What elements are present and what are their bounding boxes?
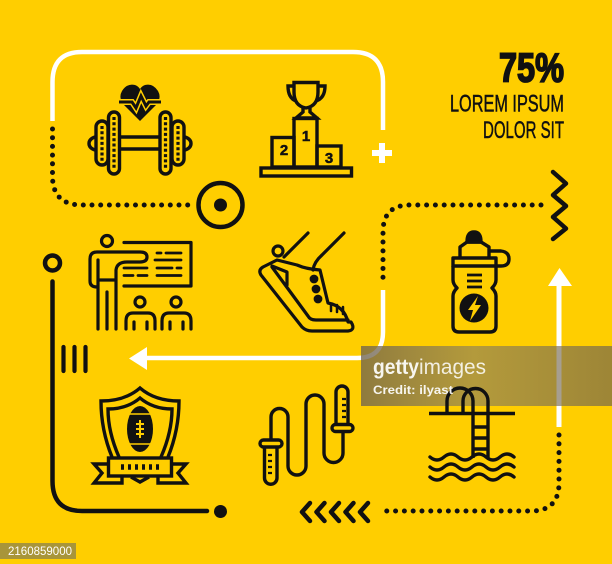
heart: [120, 85, 160, 121]
white arrow left: [129, 290, 383, 370]
target circle: [198, 183, 242, 227]
headline text block: DOLOR SIT: [483, 117, 564, 144]
watermark logo text: getty: [373, 355, 419, 379]
watermark logo text: [373, 355, 486, 397]
headline text block: 75%: [499, 44, 564, 90]
icon: trophy on podium: 2: [280, 142, 288, 159]
icon: running shoe: [260, 233, 353, 331]
icon: pool ladder: [429, 388, 515, 480]
dotted connector right: [383, 205, 541, 283]
dotted connector to target: [52, 129, 190, 205]
left dark connector with ring and end dot: [45, 256, 227, 518]
zigzag: [553, 172, 566, 239]
three bars: [64, 347, 86, 371]
icon: football shield badge: [94, 388, 186, 483]
plus sign: [372, 143, 392, 163]
white connector top: [52, 52, 383, 130]
icon: trophy on podium: [261, 82, 352, 176]
watermark logo text: Credit: ilyast: [373, 383, 453, 397]
image id tag: [0, 543, 76, 559]
chevrons: [302, 503, 368, 521]
icon: presenter with audience: [90, 236, 191, 329]
watermark band: [361, 346, 612, 406]
icon: trophy on podium: 1: [302, 128, 310, 145]
icon: sports bottle: [453, 232, 509, 332]
dotted connector bottom right: [381, 435, 559, 511]
white arrow up: [548, 268, 572, 427]
icon: trophy on podium: 3: [325, 150, 333, 167]
watermark logo text: images: [419, 355, 486, 379]
image id tag: 2160859000: [8, 546, 72, 558]
icon: dumbbell with heart: [89, 85, 191, 174]
icon: jump rope: [260, 386, 353, 484]
headline text block: [450, 44, 564, 144]
